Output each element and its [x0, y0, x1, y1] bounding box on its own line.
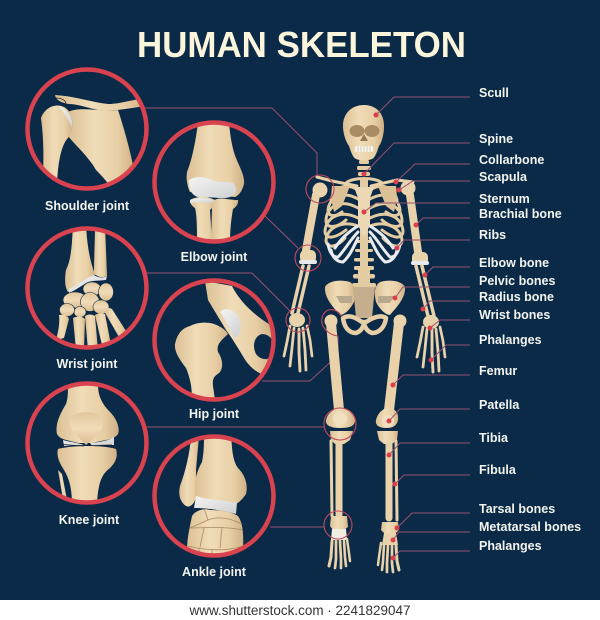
- femur: [57, 385, 119, 443]
- label: Tibia: Tibia: [479, 431, 509, 445]
- label: Brachial bone: Brachial bone: [479, 207, 562, 221]
- label: Patella: [386, 398, 520, 424]
- patella: [70, 412, 103, 445]
- panel: knee joint: [28, 384, 146, 505]
- ribcage: [325, 178, 403, 262]
- label: Pelvic bones: Pelvic bones: [479, 274, 555, 288]
- label: Patella: Patella: [479, 398, 520, 412]
- label: Elbow bone: [422, 256, 549, 278]
- label: Spine: Spine: [479, 132, 513, 146]
- label: Tibia: [386, 431, 509, 458]
- humerus: [41, 106, 73, 178]
- radius: [65, 225, 95, 292]
- label: Phalanges (foot): [390, 539, 542, 560]
- pelvis: [205, 281, 272, 376]
- joint name labels: Hip joint: [189, 407, 240, 421]
- label: Ribs: Ribs: [479, 228, 506, 242]
- skeleton figure: [284, 105, 445, 572]
- label: Scapula: Scapula: [479, 170, 528, 184]
- cartilage: [189, 177, 236, 198]
- label: Scapula: [396, 170, 528, 192]
- label: Sternum: [362, 192, 530, 214]
- tibia: [195, 434, 247, 504]
- label: Phalanges (hand): Phalanges: [479, 333, 542, 347]
- radius: [190, 197, 215, 242]
- label: Fibula: Fibula: [479, 463, 517, 477]
- label: Tarsal bones: Tarsal bones: [479, 502, 555, 516]
- footer strip: www.shutterstock.com · 2241829047: [189, 603, 410, 618]
- panel: elbow joint: [154, 122, 274, 242]
- panel: wrist joint: [28, 225, 146, 350]
- ulna: [94, 231, 107, 277]
- label: Brachial bone: [414, 207, 562, 228]
- label: Femur: [390, 364, 517, 388]
- joint name labels: [45, 199, 248, 579]
- panel: ankle joint: [154, 434, 274, 562]
- cartilage: [194, 496, 237, 514]
- joint name labels: Wrist joint: [57, 357, 118, 371]
- legs: [324, 314, 406, 520]
- panel: shoulder joint: [28, 70, 146, 190]
- cartilage: [58, 106, 72, 128]
- cartilage: [63, 437, 114, 446]
- skull: [343, 105, 384, 160]
- label: Scull: [374, 86, 509, 118]
- arms: [292, 180, 434, 316]
- label: Collarbone: [394, 153, 544, 184]
- joint name labels: Ankle joint: [182, 565, 247, 579]
- joint name labels: Elbow joint: [181, 250, 248, 264]
- cartilage: [220, 309, 241, 338]
- label: Scull: Scull: [479, 86, 509, 100]
- clavicle: [55, 95, 146, 111]
- label: Elbow bone: Elbow bone: [479, 256, 549, 270]
- label: Sternum: Sternum: [479, 192, 530, 206]
- clavicles and scapulae: [317, 177, 413, 212]
- label: Ribs: [394, 228, 506, 250]
- title: HUMAN SKELETON: [137, 24, 466, 65]
- joint name labels: Shoulder joint: [45, 199, 130, 213]
- foot bones: [187, 509, 244, 554]
- footer strip: [0, 600, 600, 620]
- metacarpals: [56, 315, 69, 340]
- label: Collarbone: Collarbone: [479, 153, 544, 167]
- label: Wrist bones: [428, 308, 550, 330]
- femur: [175, 323, 228, 400]
- joint name labels: Knee joint: [59, 513, 120, 527]
- scapula: [68, 109, 134, 186]
- label: Tarsal bones: [394, 502, 555, 530]
- label: Metatarsal bones: [390, 520, 581, 542]
- sternum: [354, 187, 374, 238]
- label: Wrist bones: Wrist bones: [479, 308, 550, 322]
- hands: [284, 313, 445, 372]
- cartilage: [69, 275, 107, 293]
- label: Fibula: [392, 463, 517, 486]
- bone labels with leader lines and dots: [362, 86, 581, 560]
- label: Spine: [362, 132, 513, 176]
- fibula: [58, 470, 66, 496]
- ulna: [211, 198, 238, 242]
- carpal bones: [60, 282, 114, 318]
- joint location rings: [286, 175, 356, 539]
- leader lines from joint panels: [145, 108, 338, 527]
- spine: [352, 160, 376, 292]
- tibia: [57, 446, 117, 505]
- label: Pelvic bones: [392, 274, 555, 300]
- label: Radius bone: Radius bone: [479, 290, 554, 304]
- feet: [329, 516, 399, 572]
- label: Radius bone: [420, 290, 554, 312]
- label: Femur: Femur: [479, 364, 517, 378]
- fibula: [179, 436, 199, 507]
- label: Phalanges (foot): Phalanges: [479, 539, 542, 553]
- label: Metatarsal bones: Metatarsal bones: [479, 520, 581, 534]
- label: Phalanges (hand): [428, 333, 542, 362]
- humerus: [187, 122, 244, 197]
- panel: hip joint: [154, 280, 274, 400]
- pelvis: [325, 281, 405, 333]
